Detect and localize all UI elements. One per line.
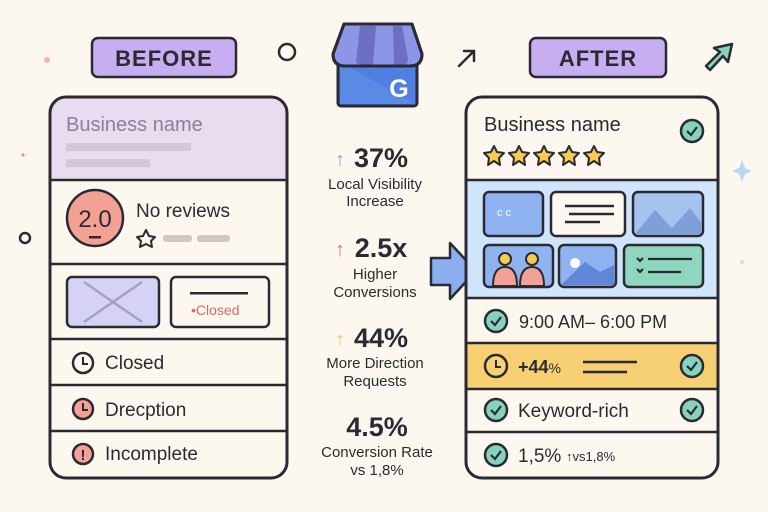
row: keyword-rich: Keyword-rich — [518, 401, 629, 422]
stat: 44%: Requests — [343, 373, 407, 390]
stat: 37%: Local Visibility — [328, 176, 422, 193]
header: business name — [50, 97, 287, 180]
stat: 4.5%: 4.5% — [346, 412, 408, 442]
photo placeholders — [67, 277, 269, 327]
row: conversion: ↑vs1,8% — [566, 449, 616, 464]
decorative dots — [20, 44, 752, 264]
row: incomplete: ! — [80, 447, 86, 464]
stat: 2.5x: ↑ — [335, 239, 345, 261]
row: closed — [73, 353, 164, 374]
media grid: c c — [497, 207, 512, 219]
row: +44% — [466, 343, 718, 389]
row: conversion — [485, 444, 616, 467]
header — [484, 114, 703, 165]
stat: 44%: More Direction — [326, 355, 424, 372]
stat: 37% — [328, 143, 422, 210]
title: AFTER: AFTER — [559, 46, 637, 71]
stats column — [321, 143, 433, 479]
rating row — [67, 190, 230, 247]
stat: 37%: ↑ — [335, 149, 345, 171]
stat: 4.5%: vs 1,8% — [350, 462, 404, 479]
row: hours: 9:00 AM– 6:00 PM — [519, 312, 667, 332]
rating row: No reviews — [136, 201, 230, 222]
stat: 37%: 37% — [354, 143, 408, 173]
stat: 4.5%: Conversion Rate — [321, 444, 433, 461]
rating row: 2.0 — [78, 206, 112, 233]
photo placeholders: •Closed — [191, 302, 239, 318]
stat: 2.5x: Conversions — [333, 284, 417, 301]
row: description: Drecption — [105, 400, 186, 421]
title: AFTER — [530, 38, 666, 77]
stat: 37%: Increase — [346, 193, 404, 210]
row: description — [73, 399, 186, 421]
row: keyword-rich — [485, 399, 703, 422]
media grid — [466, 180, 718, 298]
stat: 4.5% — [321, 412, 433, 479]
arrow: before to after — [431, 243, 476, 299]
header: Business name — [484, 114, 621, 136]
stat: 2.5x — [333, 233, 417, 301]
title: BEFORE — [92, 38, 236, 77]
row: closed: Closed — [105, 353, 164, 374]
panel: before card — [50, 97, 287, 478]
icon: small arrow — [459, 51, 474, 66]
row: conversion: 1,5% — [518, 446, 561, 467]
row: incomplete: Incomplete — [105, 444, 198, 465]
panel: after card — [466, 97, 718, 478]
stat: 2.5x: Higher — [353, 266, 397, 283]
icon: google business store: G — [389, 75, 409, 103]
row: +44%: +44% — [518, 357, 561, 377]
stat: 44% — [326, 323, 424, 390]
icon: teal arrow — [706, 44, 732, 70]
stat: 44%: ↑ — [335, 329, 345, 351]
icon: google business store — [333, 24, 422, 106]
stat: 2.5x: 2.5x — [355, 233, 407, 263]
title: BEFORE: BEFORE — [115, 46, 213, 71]
stat: 44%: 44% — [354, 323, 408, 353]
header: business name: Business name — [66, 114, 203, 136]
